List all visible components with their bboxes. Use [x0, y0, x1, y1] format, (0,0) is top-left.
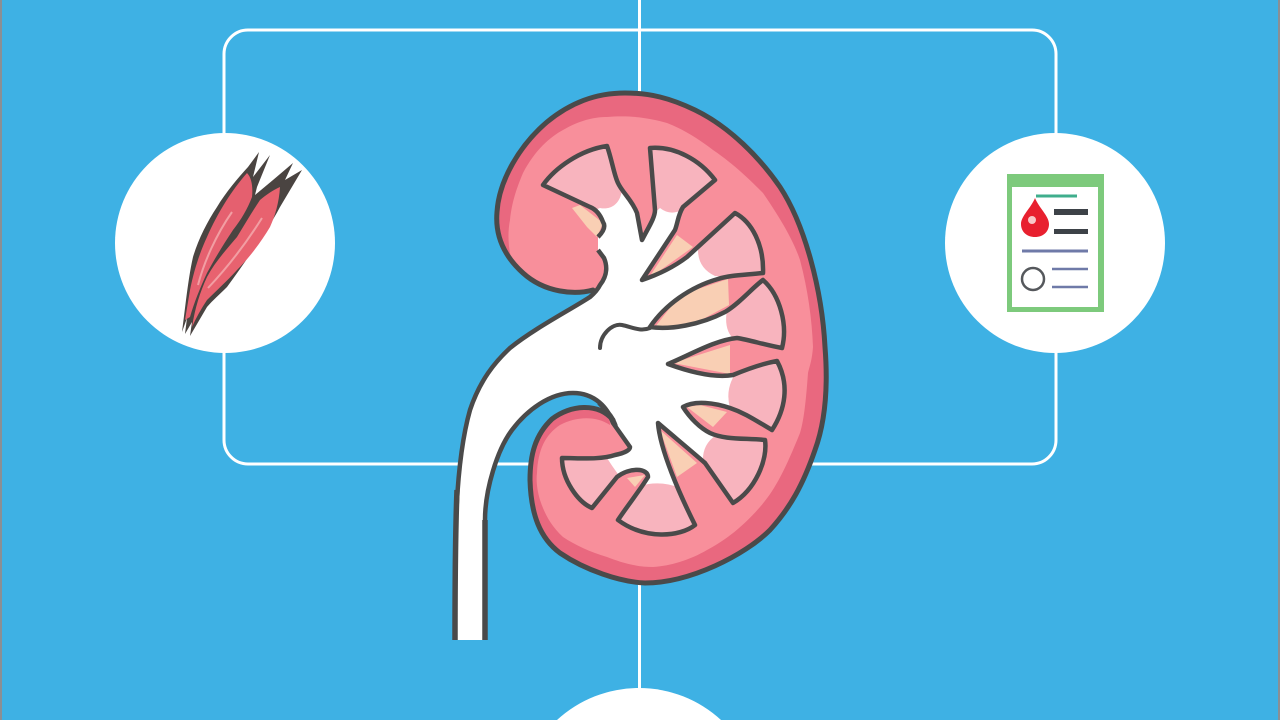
circle: muscle: [115, 133, 335, 353]
renal curl line: [600, 325, 650, 348]
ureter wall thickening: [455, 490, 485, 640]
kidney cortex: [508, 116, 813, 567]
icon: blood test report: [1007, 174, 1104, 312]
circle: bottom (cropped): [557, 688, 721, 720]
connector frame: [224, 0, 1056, 700]
column tips: [572, 205, 730, 487]
kidney illustration: [455, 93, 826, 640]
hilum wedge: [597, 404, 618, 426]
renal pyramids: [546, 149, 782, 532]
kidney body rim: [497, 93, 826, 583]
icon: blood drop: [1021, 198, 1049, 237]
icon: muscle fibres: [182, 152, 302, 336]
kidney inner outline: [455, 146, 785, 640]
renal sinus and ureter: [455, 146, 785, 640]
kidney outer outline: [497, 93, 826, 583]
circle: blood test report: [945, 133, 1165, 353]
